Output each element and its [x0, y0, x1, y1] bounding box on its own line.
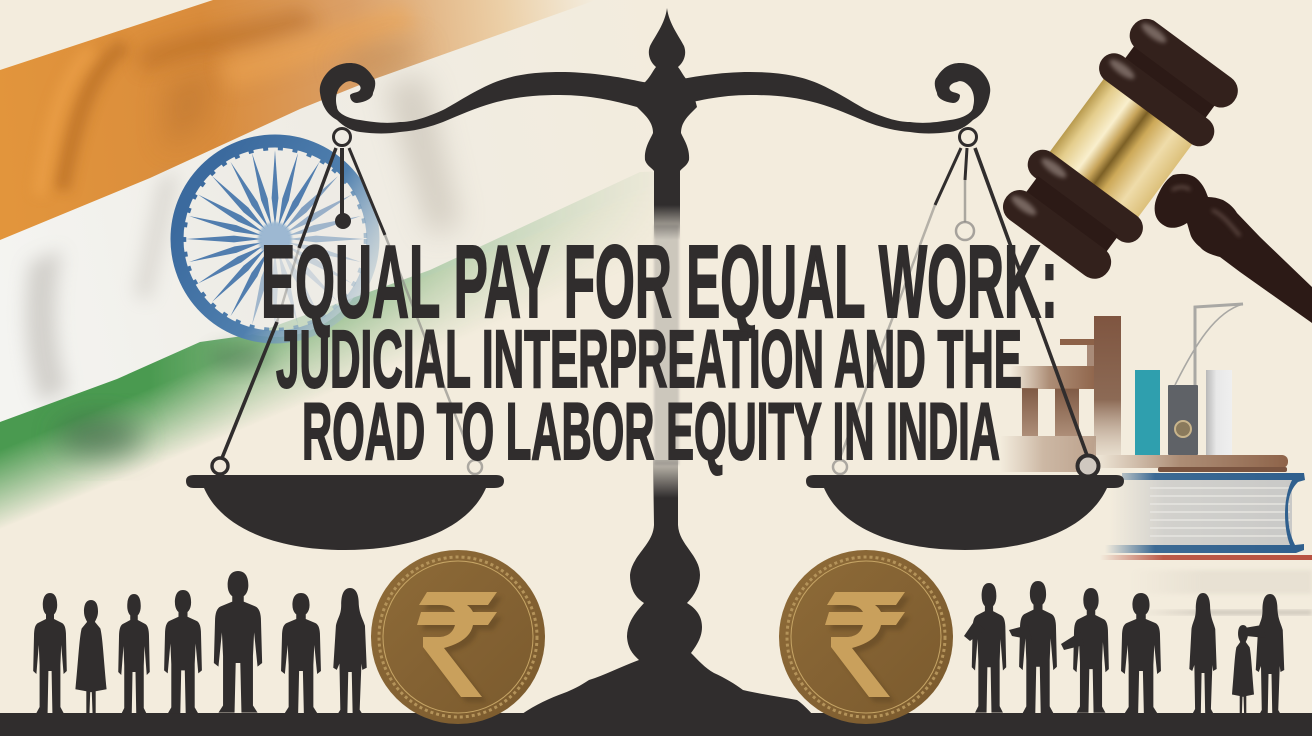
rupee shadow [830, 597, 910, 702]
person 2 [1019, 581, 1057, 713]
person 1 [972, 583, 1006, 713]
right rupee coin [779, 550, 953, 724]
flag: green band [0, 172, 647, 526]
silhouettes: left group [33, 571, 367, 714]
big book pages [1110, 480, 1292, 545]
flat brown book [1090, 455, 1288, 468]
top neck [1122, 44, 1216, 121]
pale book stripes [1130, 570, 1312, 594]
flag: white band [0, 0, 700, 425]
icon: books and desk objects [1000, 304, 1312, 615]
right hanger [833, 128, 1098, 476]
person 6: child [1232, 625, 1254, 714]
chakra rim [177, 141, 373, 337]
rupee symbol [417, 592, 497, 697]
thin ring [383, 561, 533, 713]
icon: gavel [993, 9, 1312, 323]
person 1 gesture [964, 620, 985, 641]
person 3 gesture [1061, 632, 1084, 650]
chakra hub [258, 222, 292, 256]
right beam arm [667, 63, 990, 134]
person 3 [1073, 588, 1109, 713]
big book top cover [1105, 473, 1305, 553]
page lines [1150, 488, 1290, 536]
teal book [1135, 370, 1160, 455]
central column pale section [654, 225, 679, 465]
rupee symbol [825, 592, 905, 697]
bottom inner ring [1022, 144, 1149, 249]
icon: Ashoka Chakra [177, 141, 373, 337]
wood highlights [1007, 18, 1169, 220]
right pan [806, 475, 1124, 550]
thin ring [791, 561, 941, 713]
flag: green fold shadow [58, 417, 142, 457]
beaded ring [787, 557, 945, 717]
gavel handle [1155, 174, 1312, 323]
person 7 arm [1244, 625, 1266, 638]
left pan [186, 475, 504, 550]
big book red cover [1100, 555, 1312, 560]
flag: soft fold shadow [385, 75, 460, 235]
coin body [779, 550, 953, 724]
pale red stripe [1140, 610, 1312, 615]
flag: saffron fold shading [40, 5, 425, 195]
person 4 [164, 590, 202, 714]
person 1 [33, 593, 67, 713]
person 2 gesture [1009, 625, 1032, 640]
top inner ring [1093, 47, 1220, 152]
left beam arm [320, 63, 667, 134]
flag: saffron band [0, 0, 596, 240]
Indian flag backdrop [0, 0, 648, 526]
left hanger [212, 128, 482, 474]
person 7 [1256, 594, 1284, 714]
chakra spokes [186, 150, 364, 328]
lamp arm [1175, 304, 1243, 385]
person 2 [75, 600, 107, 714]
flag: shadow under chakra [208, 346, 272, 370]
bottom neck [1025, 176, 1118, 253]
person 5 [214, 571, 262, 713]
person 4 [1121, 593, 1161, 713]
beaded ring [379, 557, 537, 717]
ground strip [0, 713, 1312, 736]
title [261, 224, 1058, 477]
person 6 [281, 593, 321, 713]
chakra teeth [184, 148, 366, 330]
person 3 [118, 594, 150, 714]
finial and upper column [637, 8, 697, 240]
white book [1206, 370, 1232, 455]
lower column and base [522, 460, 812, 714]
top outer disk [1123, 12, 1244, 114]
grey canister [1168, 385, 1198, 455]
left rupee coin [371, 550, 545, 724]
balance scale [186, 8, 1124, 714]
brass band [1047, 75, 1195, 221]
person 5 [1189, 593, 1217, 713]
bottom outer disk [997, 184, 1118, 285]
person 7 [333, 588, 367, 714]
wooden furniture [1000, 316, 1121, 472]
flag: white band fold shadow [26, 250, 68, 402]
coin body [371, 550, 545, 724]
rupee shadow [422, 597, 502, 702]
flat brown book lower [1158, 467, 1287, 472]
flag: shadow left of chakra [135, 172, 178, 300]
silhouettes: right group [964, 581, 1284, 714]
gavel head [993, 9, 1248, 288]
